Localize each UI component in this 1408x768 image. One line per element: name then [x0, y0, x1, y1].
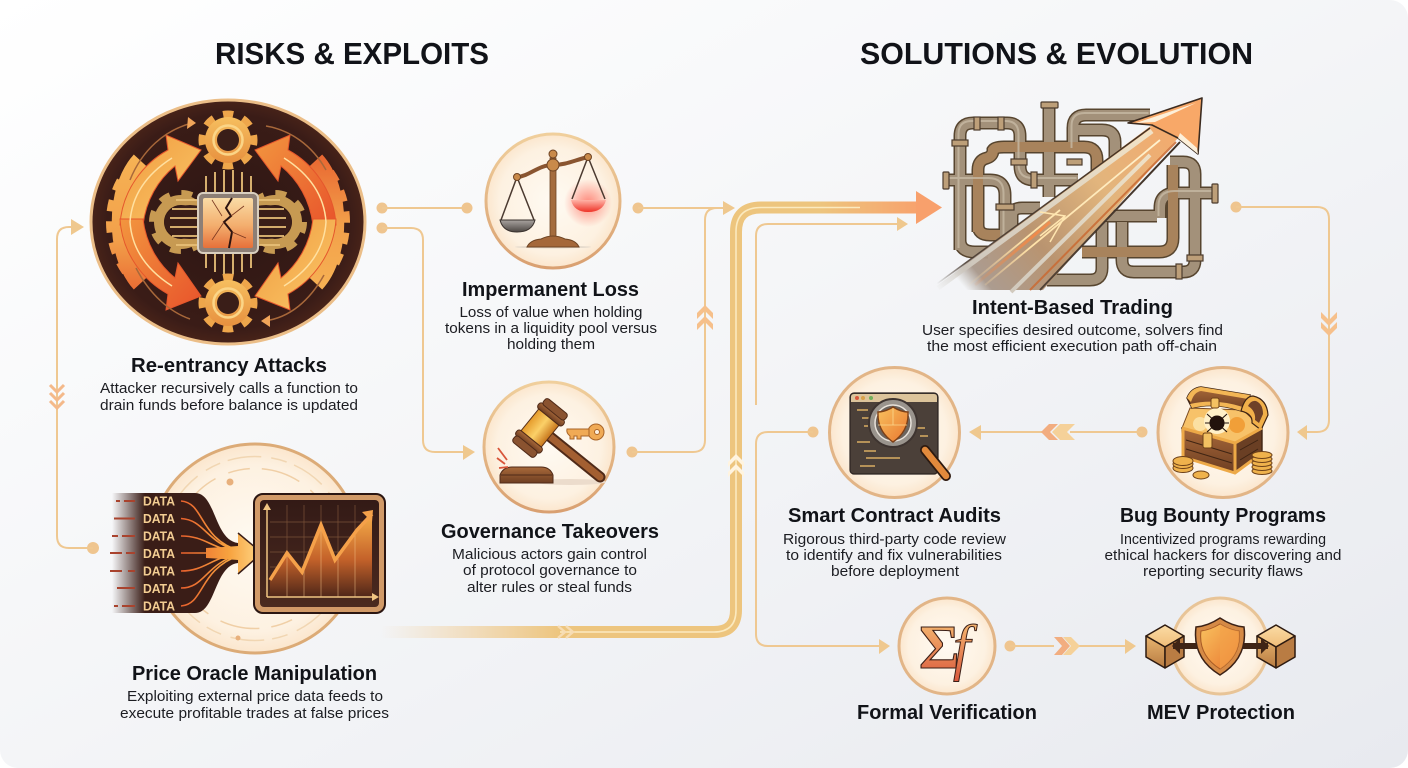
description: Exploiting external price data feeds to [127, 689, 383, 705]
brown pipes fill [978, 147, 1173, 252]
panel: bug bounty programs [1104, 368, 1342, 580]
pipes dark outline [948, 106, 1215, 280]
panel: MEV protection [1146, 598, 1295, 724]
arrow: intent-based trading to bug bounty [1230, 202, 1337, 440]
heading: Governance Takeovers [441, 521, 659, 543]
pipes fill [948, 106, 1215, 280]
cube right [1257, 625, 1295, 668]
icon: data feeds into chart: DATA [143, 547, 175, 561]
pipe flanges [943, 102, 1218, 279]
chart [254, 494, 385, 613]
shaft [930, 125, 1178, 290]
description: Incentivized programs rewarding [1120, 532, 1326, 548]
icon: data feeds into chart: DATA [143, 582, 175, 596]
icon: data feeds into chart [110, 444, 385, 653]
icon: sigma f [899, 598, 995, 694]
description: execute profitable trades at false prices [120, 706, 389, 722]
converging feed lines [181, 501, 240, 606]
arrow: governance to solutions [626, 208, 726, 458]
icon: shield between blocks [1146, 598, 1295, 694]
heading: Re-entrancy Attacks [131, 355, 327, 377]
heading: MEV Protection [1147, 702, 1295, 724]
description [445, 305, 657, 353]
heading: solutions and evolution: SOLUTIONS & EVOLUTION [860, 36, 1253, 71]
description [120, 689, 389, 722]
panel: governance takeovers [441, 382, 659, 596]
icon: gears, arrows and cracked chip [91, 100, 365, 344]
bottom gear [203, 278, 253, 328]
arrow: thin secondary line into intent-based trading [756, 217, 908, 405]
arrow: re-entrancy to impermanent loss [376, 202, 472, 214]
description [100, 381, 358, 414]
gavel head [510, 396, 570, 460]
impact marks [497, 448, 508, 468]
big gear arcs [112, 173, 127, 271]
lid [1187, 387, 1250, 411]
description [452, 547, 647, 596]
double arrow [1173, 643, 1268, 649]
arrow: bug bounty to audits [969, 424, 1148, 440]
panel: intent-based trading [922, 98, 1223, 355]
thin orbit arrows [130, 123, 326, 321]
shaft glints [965, 140, 1160, 288]
side gears [152, 193, 210, 251]
icon: data feeds into chart: DATA [143, 564, 175, 578]
cracked chip [198, 193, 258, 253]
pipes highlight [946, 113, 1214, 248]
heading: Impermanent Loss [462, 279, 639, 301]
description: User specifies desired outcome, solvers find [922, 323, 1223, 339]
description: Attacker recursively calls a function to [100, 381, 358, 397]
description: before deployment [831, 564, 959, 580]
icon: sigma f: f [953, 614, 978, 682]
description: Malicious actors gain control [452, 547, 647, 563]
bug [1205, 414, 1229, 432]
icon: pipes bypassed by arrow [930, 98, 1218, 292]
description: alter rules or steal funds [467, 580, 632, 596]
arrow head [1128, 98, 1202, 154]
gavel block [500, 467, 553, 483]
arrow: re-entrancy to governance [376, 222, 475, 460]
description [1104, 532, 1342, 580]
heading: Formal Verification [857, 702, 1037, 724]
description: the most efficient execution path off-chain [927, 339, 1217, 355]
arrow: price oracle back to re-entrancy [50, 219, 99, 554]
heading: Bug Bounty Programs [1120, 505, 1326, 527]
shield [1196, 618, 1244, 675]
description: tokens in a liquidity pool versus [445, 321, 657, 337]
description [783, 532, 1007, 580]
heading: risks and exploits: RISKS & EXPLOITS [215, 36, 489, 71]
icon: gavel and key [484, 382, 614, 512]
icon: sigma f: Σ [919, 614, 960, 682]
gavel handle [548, 435, 600, 477]
description: to identify and fix vulnerabilities [786, 548, 1002, 564]
description: drain funds before balance is updated [100, 398, 358, 414]
looping arrows [120, 135, 201, 225]
interior [1182, 408, 1262, 443]
description: Loss of value when holding [460, 305, 642, 321]
arrow: formal verification to MEV protection [1004, 637, 1136, 655]
description [922, 323, 1223, 355]
arrow: impermanent loss to solutions [632, 201, 735, 215]
description: Rigorous third-party code review [783, 532, 1007, 548]
left red dashes [110, 501, 135, 606]
description: reporting security flaws [1143, 564, 1303, 580]
panel: formal verification [857, 598, 1037, 724]
heading: Price Oracle Manipulation [132, 663, 377, 685]
key [567, 424, 604, 440]
panel: re-entrancy attacks [91, 100, 365, 414]
icon: data feeds into chart: DATA [143, 600, 175, 614]
description: of protocol governance to [463, 563, 637, 579]
coins [1173, 452, 1272, 479]
panel: smart contract audits [783, 368, 1007, 580]
heading: Smart Contract Audits [788, 505, 1001, 527]
data labels: DATA [143, 494, 175, 508]
panel: price oracle manipulation [110, 444, 389, 722]
icon: data feeds into chart: DATA [143, 512, 175, 526]
cube left [1146, 625, 1184, 668]
description: holding them [507, 337, 595, 353]
icon: unbalanced scales [486, 134, 620, 268]
arrow: audits to formal verification [756, 426, 890, 654]
chest body [1182, 428, 1235, 473]
top gear [203, 115, 253, 165]
icon: data feeds into chart: DATA [143, 530, 175, 544]
description: ethical hackers for discovering and [1104, 548, 1342, 564]
arrow: main band from oracle to intent-based trading [380, 191, 942, 638]
icon: code window and magnifier [830, 368, 960, 498]
panel: impermanent loss [445, 134, 657, 353]
icon: treasure chest with bug [1158, 368, 1288, 498]
data band [112, 493, 262, 613]
heading: Intent-Based Trading [972, 297, 1173, 319]
chip pins [170, 170, 286, 274]
